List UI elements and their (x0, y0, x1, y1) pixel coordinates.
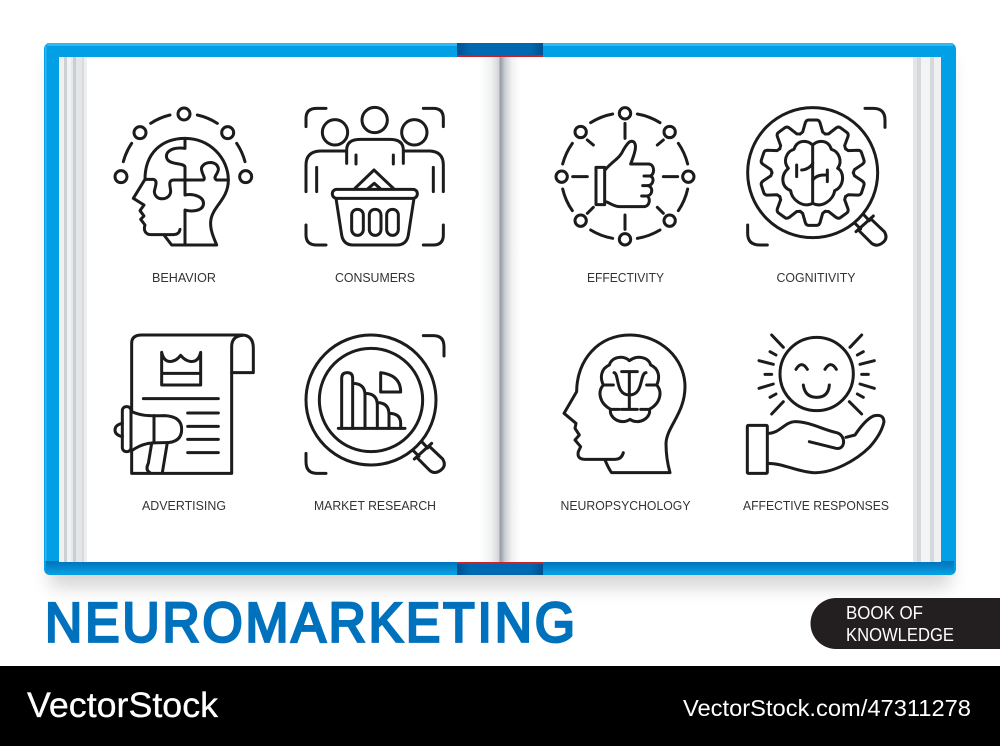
icon: neuropsychology head (564, 335, 685, 473)
label: behavior: BEHAVIOR (152, 270, 216, 285)
title: NEUROMARKETING (45, 592, 575, 654)
open book pages (59, 57, 941, 562)
footer image id: VectorStock.com/47311278 (683, 695, 971, 721)
badge: book of knowledge: KNOWLEDGE (846, 625, 954, 645)
icon: market research magnifier chart (306, 335, 444, 473)
label: cognitivity: COGNITIVITY (776, 270, 856, 285)
book cover (44, 43, 956, 575)
label: market research: MARKET RESEARCH (314, 498, 436, 513)
icon: effectivity thumbs up network (556, 108, 694, 245)
icon: consumers with basket (306, 107, 443, 245)
icon: advertising newspaper megaphone (115, 335, 253, 473)
icon: behavior head with puzzle (115, 108, 252, 245)
label: effectivity: EFFECTIVITY (587, 270, 664, 285)
footer logo text: VectorStock (27, 686, 219, 725)
spine band top (457, 43, 543, 57)
icon: cognitivity magnifier gear brain (748, 108, 886, 245)
label: consumers: CONSUMERS (335, 270, 415, 285)
label: advertising: ADVERTISING (142, 498, 226, 513)
badge: book of knowledge (810, 598, 1000, 649)
label: affective responses: AFFECTIVE RESPONSES (743, 498, 889, 513)
icon: affective responses smile on hand (747, 335, 884, 473)
footer bar (0, 666, 1000, 746)
spine band bottom (457, 562, 543, 575)
book shadow (50, 60, 950, 587)
label: neuropsychology: NEUROPSYCHOLOGY (560, 498, 691, 513)
badge: book of knowledge: BOOK OF (846, 603, 923, 623)
